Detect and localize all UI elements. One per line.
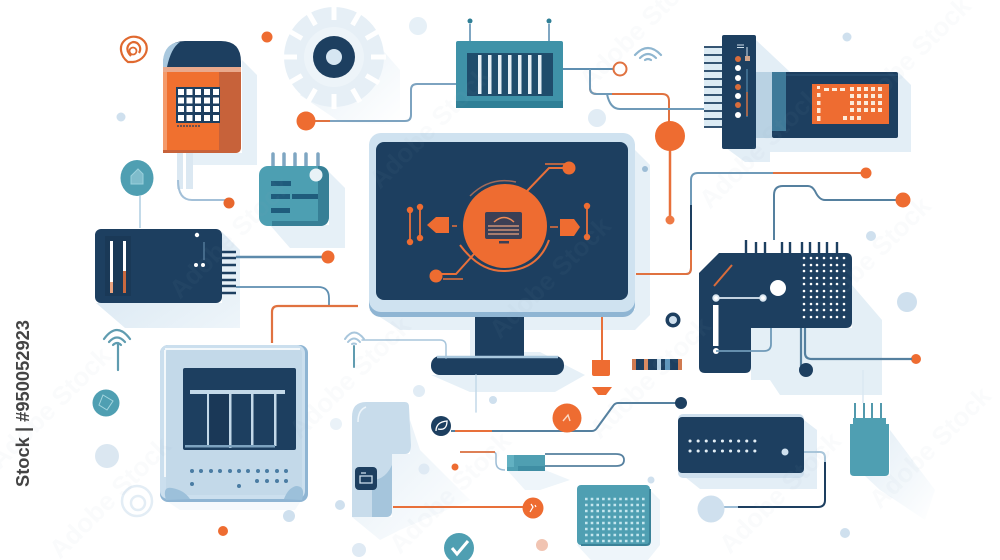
device: navy LED strip <box>678 414 825 522</box>
icon: colour strip <box>632 359 682 370</box>
device: orange module <box>163 41 241 208</box>
inner screen <box>183 368 296 450</box>
watermarks: Adobe Stock <box>383 425 517 559</box>
device: navy circuit board <box>699 240 912 377</box>
wire: monitor to right board top <box>636 173 897 274</box>
device: teal radio box <box>456 18 563 108</box>
watermarks: Adobe Stock <box>693 80 827 214</box>
icon: ghost logo <box>122 486 152 516</box>
watermarks: Adobe Stock <box>283 310 417 444</box>
icon: wifi top <box>635 48 661 60</box>
wire to round node <box>724 452 825 507</box>
wires <box>236 257 358 343</box>
connector with loop <box>460 452 624 471</box>
small background dots <box>95 17 917 557</box>
device: teal antenna box <box>850 370 889 476</box>
icon: orange plug <box>592 317 612 395</box>
watermarks: Adobe Stock <box>863 380 997 514</box>
device: teal chip <box>259 154 329 226</box>
wire end nodes <box>860 168 921 364</box>
icon: teal drop badge <box>120 160 154 228</box>
node: large orange circle <box>655 121 685 151</box>
device: navy controller <box>95 229 358 343</box>
pale orange dot <box>536 539 548 551</box>
line: node to teal box <box>296 84 456 130</box>
watermarks: Adobe Stock <box>803 190 937 324</box>
display grid <box>176 87 220 126</box>
device: teal dot panel <box>577 485 650 545</box>
watermarks: Adobe Stock <box>713 425 847 559</box>
tube connector <box>177 153 234 208</box>
orange dot <box>452 464 458 470</box>
icon: wifi left <box>104 330 130 370</box>
icon: pale gear <box>282 5 386 109</box>
wire: to bottom orange node <box>393 498 544 518</box>
centre orange circle with links <box>407 162 590 282</box>
icon: small ring <box>666 312 680 328</box>
indicator dots <box>190 469 288 488</box>
orange dot <box>218 526 228 536</box>
icon: teal tag badge <box>92 390 120 416</box>
wire: leaf node to navy node <box>431 397 687 436</box>
watermarks: Adobe Stock <box>363 60 497 194</box>
shadows behind devices <box>96 30 935 560</box>
node: small orange circle <box>666 216 674 224</box>
watermarks: Adobe Stock <box>483 210 617 344</box>
device: bottom left panel <box>160 345 308 502</box>
icon: teal check badge <box>444 533 474 560</box>
monitor stand <box>431 312 564 375</box>
watermarks: Adobe Stock <box>583 310 717 444</box>
device: light handheld <box>352 402 411 517</box>
device: pin module <box>704 35 756 149</box>
watermarks: Adobe Stock <box>163 170 297 304</box>
orange dot <box>262 32 272 42</box>
icon: wifi centre with wire <box>345 332 476 412</box>
device: central monitor <box>369 133 635 375</box>
dot matrix <box>803 257 845 318</box>
screen glyph <box>485 212 522 244</box>
wires: top centre to right modules <box>563 62 704 216</box>
side stamp: Stock | #950052923 <box>13 320 33 487</box>
device: navy display module <box>772 72 898 138</box>
icon: orange spiral <box>121 37 147 62</box>
orange arrow badge <box>552 404 582 432</box>
